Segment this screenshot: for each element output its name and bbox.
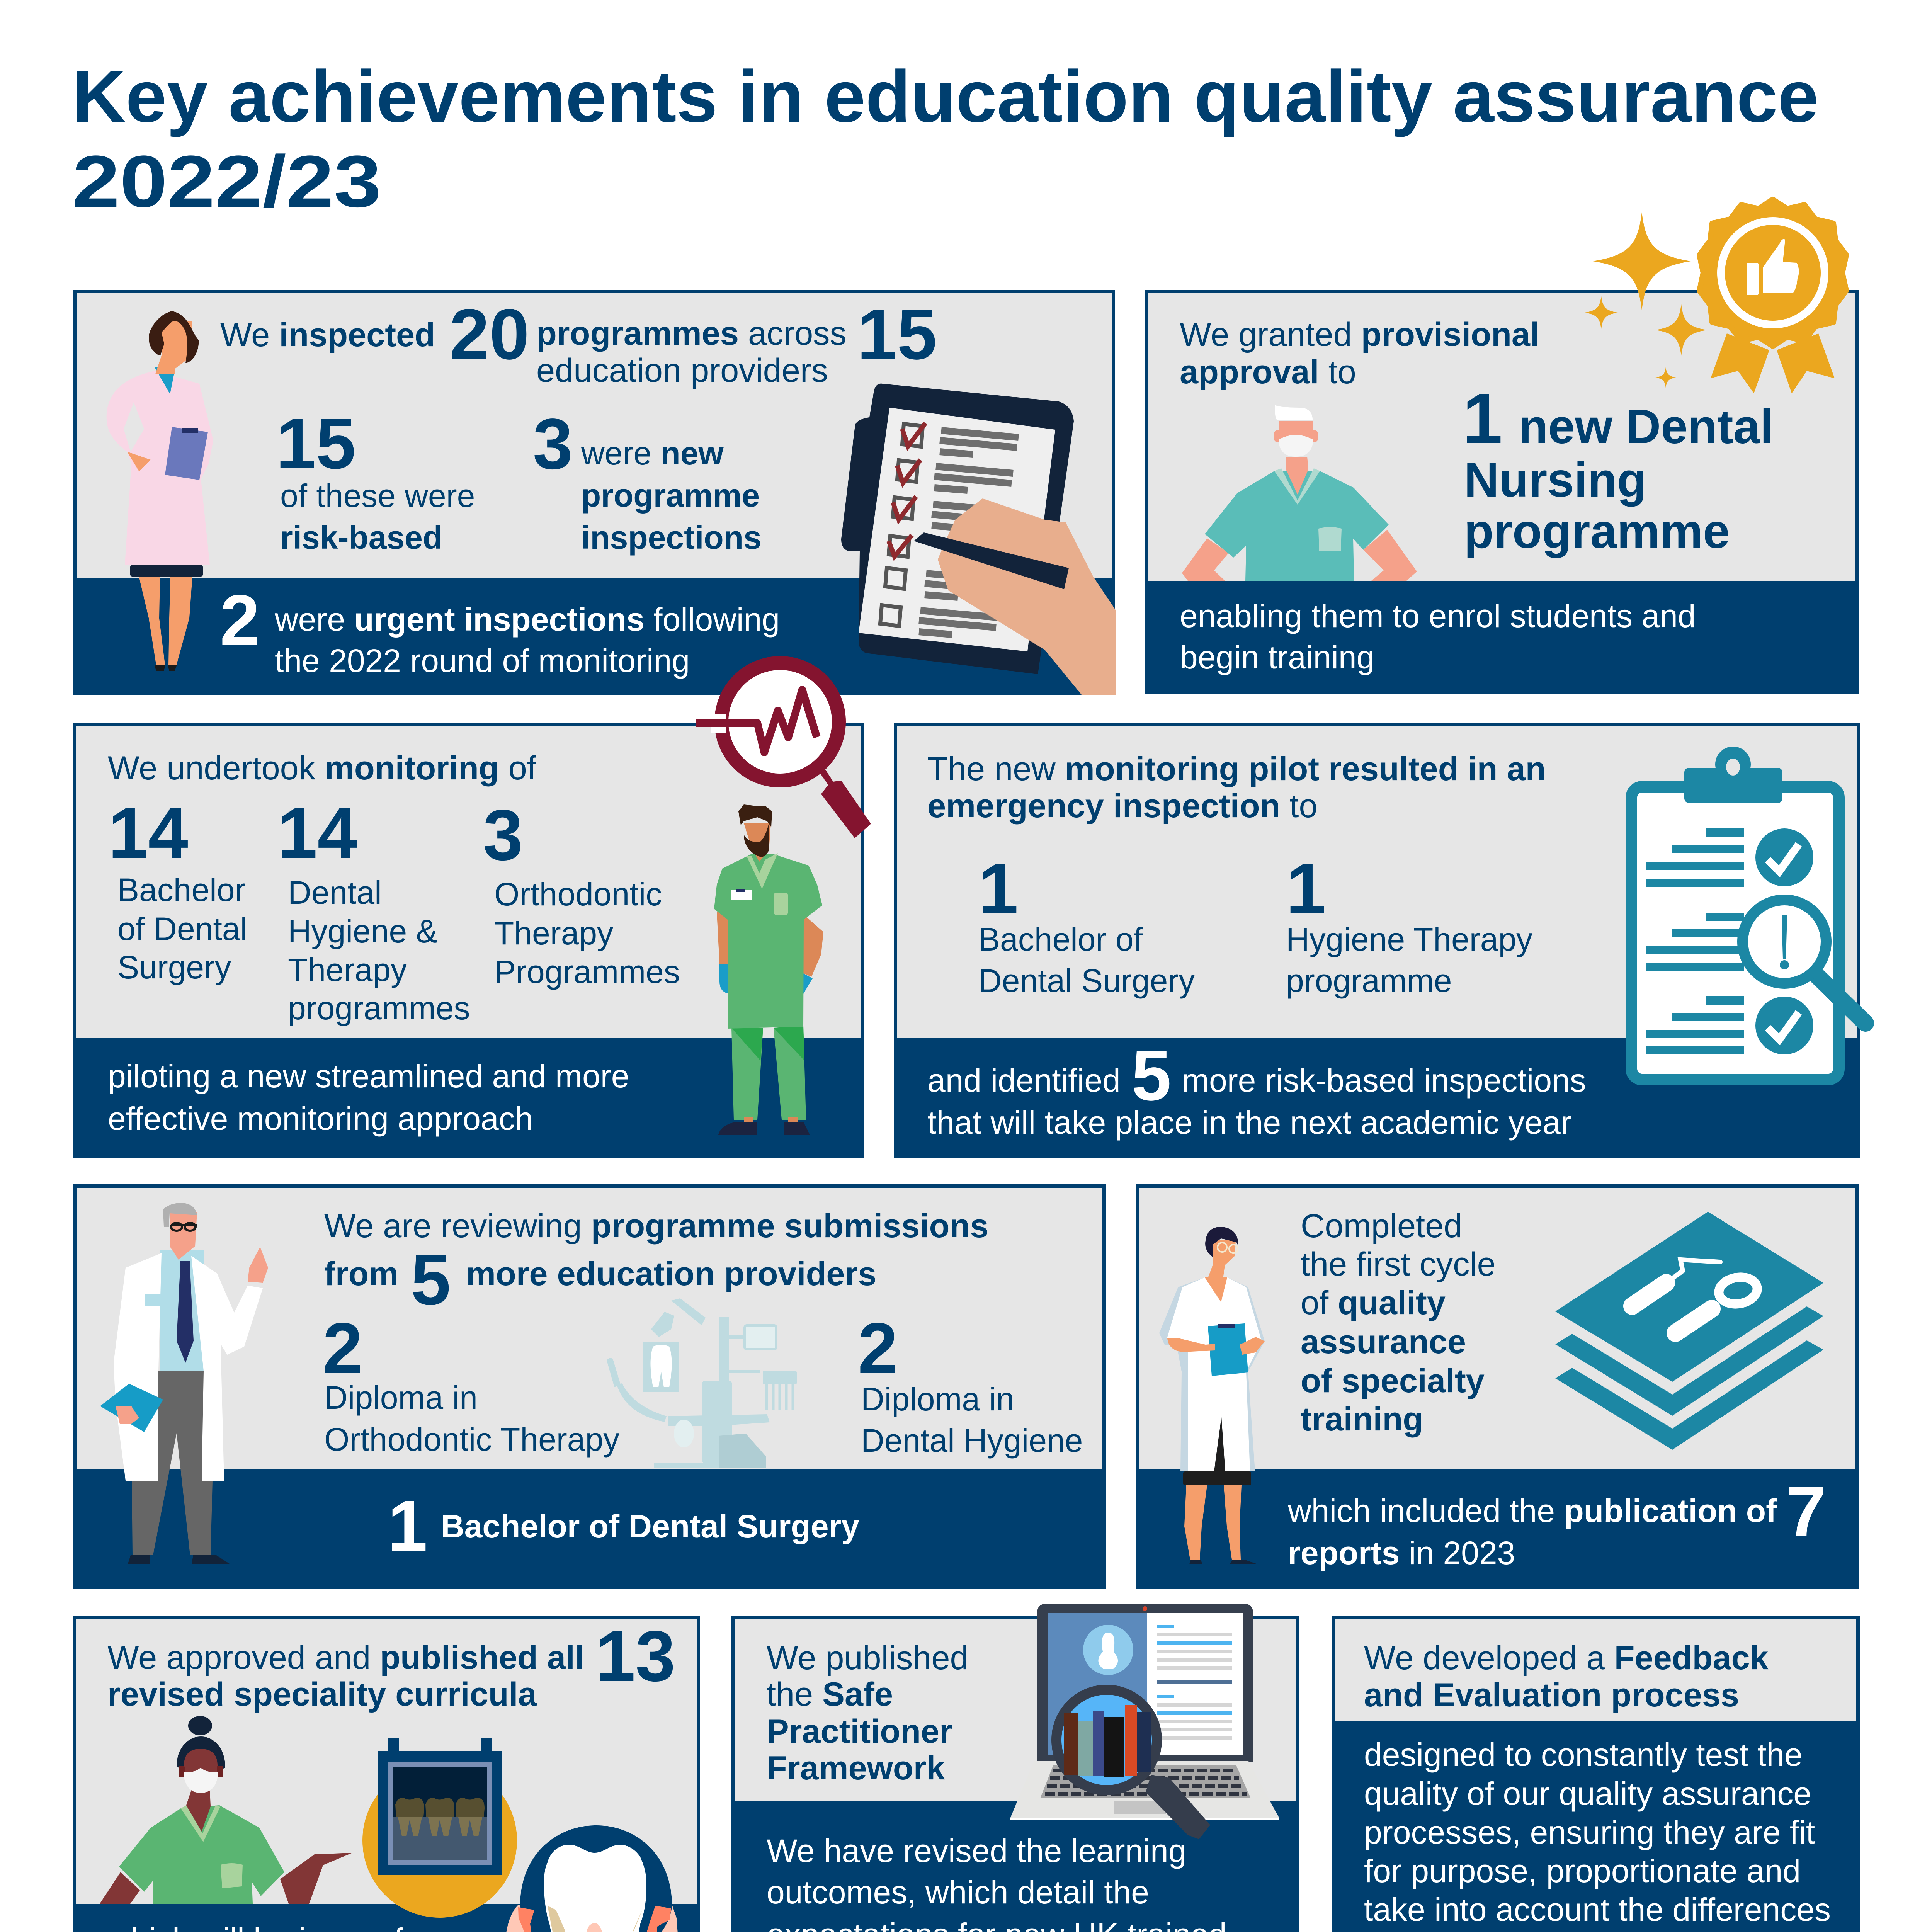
text: first cycle quality assurance: training [1301, 1401, 1423, 1438]
number: 2 orthodontic: 2 [323, 1308, 362, 1388]
text: first cycle quality assurance: quality [1338, 1284, 1446, 1321]
illustration: x-ray on gold circle [362, 1738, 517, 1918]
text: reviewing programme submissions: from [324, 1255, 398, 1293]
text: of these were risk-based: of these were [280, 478, 475, 514]
illustration: tooth in gum [504, 1825, 684, 1932]
text: reviewing programme submissions: programme submissions [591, 1208, 988, 1245]
number: 1 hygiene: 1 [1286, 849, 1326, 929]
text: revised learning outcomes: outcomes, which detail the [767, 1874, 1149, 1910]
title: 2022/23 [72, 141, 381, 223]
panel: programme inspections [73, 290, 1116, 695]
text: new dental nursing programme: new Dental [1519, 400, 1774, 454]
illustration: nurse with mask [100, 1716, 352, 1904]
text: new dental nursing programme: programme [1464, 505, 1730, 558]
number: 1 bachelor: 1 [388, 1486, 427, 1566]
text: publication of reports: reports [1288, 1535, 1400, 1571]
number: 13: 13 [595, 1616, 675, 1696]
icon: magnifier with pulse line [696, 663, 871, 838]
text: bachelor of dental surgery: Surgery [117, 949, 231, 985]
text: diploma dental hygiene: Diploma in [861, 1381, 1014, 1417]
text: monitoring pilot resulted: monitoring pilot resulted in an [1065, 750, 1546, 787]
number: 15 risk-based: 15 [276, 404, 356, 484]
number: 20: 20 [449, 294, 529, 374]
text: orthodontic therapy: Therapy [494, 915, 613, 951]
text: designed to constantly test: designed to constantly test the [1364, 1736, 1803, 1773]
text: approved and published: revised speciality curricula [107, 1676, 537, 1713]
text: were new programme inspections: were [581, 435, 660, 471]
text: safe practitioner framework: the [767, 1676, 822, 1713]
text: dental hygiene and therapy: Hygiene & [288, 913, 438, 949]
text: safe practitioner framework: Safe [822, 1676, 893, 1713]
text: diploma dental hygiene: Dental Hygiene [861, 1422, 1083, 1459]
text: designed to constantly test: processes, ensuring they are fit [1364, 1814, 1815, 1850]
text: first cycle quality assurance: the first cycle [1301, 1246, 1496, 1283]
text: bachelor of dental surgery: of Dental [117, 911, 247, 947]
text: piloting approach: effective monitoring approach [108, 1100, 533, 1137]
panel: speciality curricula [73, 1616, 700, 1932]
number: 2 hygiene: 2 [858, 1308, 898, 1388]
panel: safe practitioner framework [731, 1604, 1299, 1932]
text: safe practitioner framework: Practitioner [767, 1713, 952, 1750]
text: designed to constantly test: quality of our quality assurance [1364, 1776, 1811, 1812]
text: we inspected: education providers [536, 352, 828, 389]
number: 14 bachelor: 14 [108, 793, 188, 873]
text: we inspected: We [220, 316, 279, 354]
number: 3: 3 [533, 404, 573, 484]
icon: sparkles [1585, 212, 1707, 388]
text: publication of reports: which included the [1287, 1493, 1564, 1529]
number: 2: 2 [220, 580, 260, 660]
text: and identified: that will take place in the next academic year [927, 1104, 1571, 1141]
number: 1: 1 [1463, 379, 1502, 459]
number: 14 hygiene: 14 [277, 793, 357, 873]
text: approved and published: We approved and [107, 1639, 380, 1676]
text: enabling students: enabling them to enrol students and [1180, 598, 1696, 634]
text: orthodontic therapy: Orthodontic [494, 876, 662, 912]
icon: clipboard with checks and magnifier [1631, 747, 1866, 1080]
text: provisional approval: approval [1180, 354, 1319, 391]
text: we inspected: inspected [279, 316, 435, 354]
text: provisional approval: to [1319, 354, 1356, 391]
panel: programme submissions [73, 1184, 1106, 1589]
text: feedback and evaluation process: We developed a [1364, 1639, 1614, 1677]
text: urgent inspections: the 2022 round of monitoring [275, 643, 690, 679]
text: monitoring pilot resulted: emergency inspection [927, 787, 1280, 825]
illustration: tablet checklist and hand [841, 384, 1116, 695]
text: bachelor of dental surgery: Bachelor [117, 872, 246, 908]
text: were new programme inspections: inspections [581, 519, 762, 556]
text: designed to constantly test: take into account the differences [1364, 1891, 1831, 1928]
text: safe practitioner framework: We published [767, 1639, 969, 1677]
text: reviewing programme submissions: more education providers [466, 1255, 876, 1293]
text: monitoring pilot resulted: to [1280, 787, 1318, 825]
number: 3 orthodontic: 3 [483, 795, 523, 875]
number: 1 bachelor: 1 [978, 849, 1018, 929]
text: provisional approval: provisional [1361, 316, 1539, 353]
text: dental hygiene and therapy: programmes [288, 990, 470, 1026]
text: publication of reports: publication of [1564, 1493, 1777, 1529]
number: 7: 7 [1786, 1472, 1826, 1552]
text: undertook monitoring: monitoring of [325, 750, 536, 787]
number: 5: 5 [411, 1240, 451, 1320]
text: new dental nursing programme: Nursing [1464, 453, 1646, 507]
text: first cycle quality assurance: of [1301, 1284, 1338, 1321]
text: dental hygiene and therapy: Dental [288, 874, 382, 911]
number: 5: 5 [1131, 1036, 1171, 1116]
illustration: woman with clipboard [107, 311, 213, 671]
title: Key achievements in education quality assurance [72, 56, 1819, 138]
panel: monitoring pilot [894, 723, 1866, 1158]
text: safe practitioner framework: Framework [767, 1750, 945, 1787]
text: diploma orthodontic therapy: Diploma in [324, 1379, 478, 1416]
number: 15 providers: 15 [857, 294, 937, 374]
text: urgent inspections: urgent inspections following [354, 601, 780, 638]
text: bachelor of dental surgery: Bachelor of [978, 921, 1143, 957]
illustration: nurse in teal scrubs [1182, 405, 1417, 581]
illustration: woman in white coat [1159, 1227, 1265, 1564]
panel: provisional approval [1145, 290, 1859, 694]
illustration: laptop with magnifier and books [1010, 1604, 1279, 1839]
icon: award rosette with thumbs up [1699, 199, 1846, 393]
text: publication of reports: in 2023 [1400, 1535, 1515, 1571]
text: dental hygiene and therapy: Therapy [288, 952, 407, 988]
text: feedback and evaluation process: and Evaluation process [1364, 1677, 1739, 1714]
icon: stacked papers with dental tools [1555, 1212, 1823, 1450]
text: monitoring pilot resulted: The new [927, 750, 1065, 787]
text: first cycle quality assurance: assurance [1301, 1323, 1466, 1361]
text: we inspected: programmes [536, 315, 739, 352]
text: were new programme inspections: new [660, 435, 724, 471]
text: and identified: more risk-based inspections [1182, 1062, 1586, 1099]
text: feedback and evaluation process: Feedback [1614, 1639, 1769, 1677]
text: piloting approach: piloting a new streamlined and more [108, 1058, 629, 1094]
text: urgent inspections: were [274, 601, 354, 638]
text: enabling students: begin training [1180, 639, 1374, 675]
text: bachelor of dental surgery: Bachelor of Dental Surgery [441, 1508, 859, 1544]
illustration: dental chair [607, 1298, 797, 1468]
text: orthodontic therapy: Programmes [494, 954, 680, 990]
text: of these were risk-based: risk-based [280, 519, 442, 556]
text: hygiene therapy programme: programme [1286, 963, 1452, 999]
panel: specialty training [1136, 1184, 1859, 1589]
text: first cycle quality assurance: of specialty [1301, 1362, 1485, 1400]
text: first cycle quality assurance: Completed [1301, 1208, 1462, 1245]
illustration: man in green scrubs [714, 804, 823, 1135]
panel: feedback and evaluation [1332, 1616, 1860, 1932]
text: and identified: and identified [927, 1062, 1121, 1099]
text: reviewing programme submissions: We are reviewing [324, 1208, 591, 1245]
text: diploma orthodontic therapy: Orthodontic Therapy [324, 1421, 619, 1458]
text: bachelor of dental surgery: Dental Surgery [978, 963, 1195, 999]
text: were new programme inspections: programme [581, 477, 760, 514]
illustration: doctor pointing [100, 1203, 268, 1564]
text: revised learning outcomes: We have revised the learning [767, 1833, 1186, 1869]
text: approved and published: published all [380, 1639, 584, 1676]
text: hygiene therapy programme: Hygiene Therapy [1286, 921, 1532, 957]
title [72, 56, 1819, 223]
text: we inspected: across [739, 315, 847, 352]
text: designed to constantly test: for purpose, proportionate and [1364, 1853, 1801, 1889]
text: undertook monitoring: We undertook [108, 750, 325, 787]
text: provisional approval: We granted [1180, 316, 1361, 353]
panel: monitoring [73, 663, 871, 1158]
